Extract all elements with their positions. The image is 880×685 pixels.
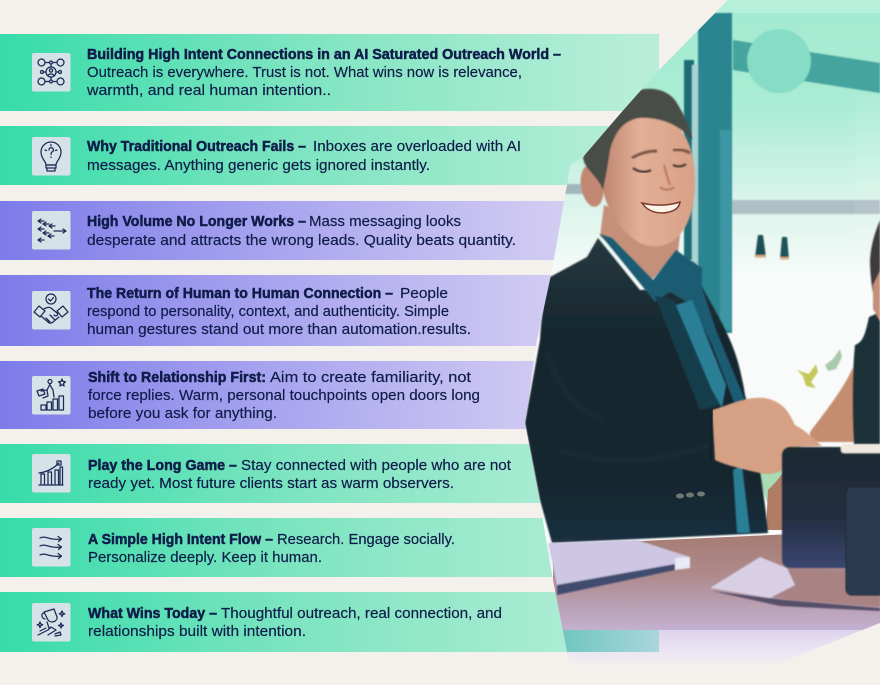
folder on table bbox=[710, 557, 880, 611]
heading and text: human gestures stand out more than automation.results. bbox=[87, 322, 471, 338]
panel: play the long game bbox=[0, 444, 570, 503]
panel: building high intent connections bbox=[0, 34, 659, 111]
heading and text: A Simple High Intent Flow – bbox=[88, 532, 273, 548]
heading and text bbox=[88, 606, 502, 640]
heading and text: Mass messaging looks bbox=[309, 214, 461, 230]
heading and text: Outreach is everywhere. Trust is not. What wins now is relevance, bbox=[87, 65, 522, 81]
panel: what wins today bbox=[0, 592, 659, 652]
heading and text: High Volume No Longer Works – bbox=[87, 214, 306, 230]
panel: shift to relationship first bbox=[0, 361, 570, 429]
heading and text bbox=[88, 458, 511, 492]
icon: light bulb bbox=[32, 137, 70, 176]
hanging ball lamp bbox=[747, 29, 811, 93]
heading and text: The Return of Human to Human Connection – bbox=[87, 286, 393, 302]
heading and text: Thoughtful outreach, real connection, and bbox=[221, 606, 502, 622]
icon: handshake bbox=[32, 291, 70, 330]
window background bbox=[520, 0, 880, 665]
sleeve highlights bbox=[545, 350, 710, 460]
hand bbox=[712, 398, 822, 474]
heading and text: Inboxes are overloaded with AI bbox=[313, 139, 521, 155]
heading and text bbox=[87, 214, 516, 249]
green triangle gap bbox=[760, 470, 782, 503]
heading and text bbox=[87, 286, 471, 338]
tablet device bbox=[782, 444, 880, 595]
panel: why traditional outreach fails bbox=[0, 126, 640, 185]
ear bbox=[580, 166, 604, 208]
woman at right edge bbox=[810, 220, 880, 445]
icon: network of people bbox=[32, 53, 70, 92]
icon: climbing steps bbox=[32, 376, 70, 414]
heading and text: Play the Long Game – bbox=[88, 458, 237, 474]
heading and text: force replies. Warm, personal touchpoints open doors long bbox=[88, 388, 480, 404]
sleeve cuff shading bbox=[711, 409, 712, 461]
teal pillar and beam bbox=[684, 13, 880, 333]
heading and text: Shift to Relationship First: bbox=[88, 370, 266, 386]
face features bbox=[632, 150, 690, 213]
heading and text: Stay connected with people who are not bbox=[241, 458, 511, 474]
jacket bbox=[525, 238, 768, 543]
icon: flowing arrows bbox=[32, 528, 70, 566]
heading and text: before you ask for anything. bbox=[88, 406, 277, 422]
laptop bbox=[548, 540, 690, 595]
heading and text bbox=[87, 139, 521, 174]
face bbox=[603, 115, 695, 246]
teal overlap strip bbox=[560, 630, 659, 652]
panel: high volume no longer works bbox=[0, 201, 570, 260]
heading and text: What Wins Today – bbox=[88, 606, 217, 622]
arm behind bbox=[766, 472, 783, 530]
table bbox=[553, 530, 880, 630]
heading and text: Aim to create familiarity, not bbox=[270, 370, 471, 386]
heading and text bbox=[86, 47, 561, 99]
heading and text: messages. Anything generic gets ignored instantly. bbox=[87, 158, 430, 174]
heading and text: People bbox=[400, 286, 448, 302]
heading and text bbox=[88, 370, 480, 422]
heading and text: Why Traditional Outreach Fails – bbox=[87, 139, 306, 155]
heading and text: ready yet. Most future clients start as warm observers. bbox=[88, 476, 454, 492]
plant bbox=[797, 349, 842, 388]
heading and text: desperate and attracts the wrong leads. Quality beats quantity. bbox=[87, 233, 516, 249]
icon: trophy bbox=[32, 603, 70, 642]
heading and text bbox=[88, 532, 455, 566]
neck bbox=[600, 205, 680, 280]
bottom lavender fade bbox=[566, 630, 862, 665]
pendant lamps bbox=[755, 235, 789, 260]
heading and text: Research. Engage socially. bbox=[277, 532, 455, 548]
shirt and collar bbox=[600, 234, 750, 533]
icon: growth chart bbox=[32, 454, 70, 492]
head bbox=[578, 89, 695, 246]
panel: a simple high intent flow bbox=[0, 518, 570, 577]
heading and text: respond to personality, context, and authenticity. Simple bbox=[87, 304, 449, 320]
heading and text: Building High Intent Connections in an AI Saturated Outreach World – bbox=[87, 47, 561, 63]
heading and text: Personalize deeply. Keep it human. bbox=[88, 550, 322, 566]
jacket buttons bbox=[676, 492, 705, 498]
heading and text: relationships built with intention. bbox=[88, 624, 306, 640]
hair bbox=[583, 89, 692, 190]
icon: converging arrows bbox=[32, 211, 70, 250]
panel: return of human to human connection bbox=[0, 275, 570, 346]
photo: smiling man shaking hands at a table bbox=[520, 0, 880, 668]
heading and text: warmth, and real human intention.. bbox=[86, 83, 331, 99]
